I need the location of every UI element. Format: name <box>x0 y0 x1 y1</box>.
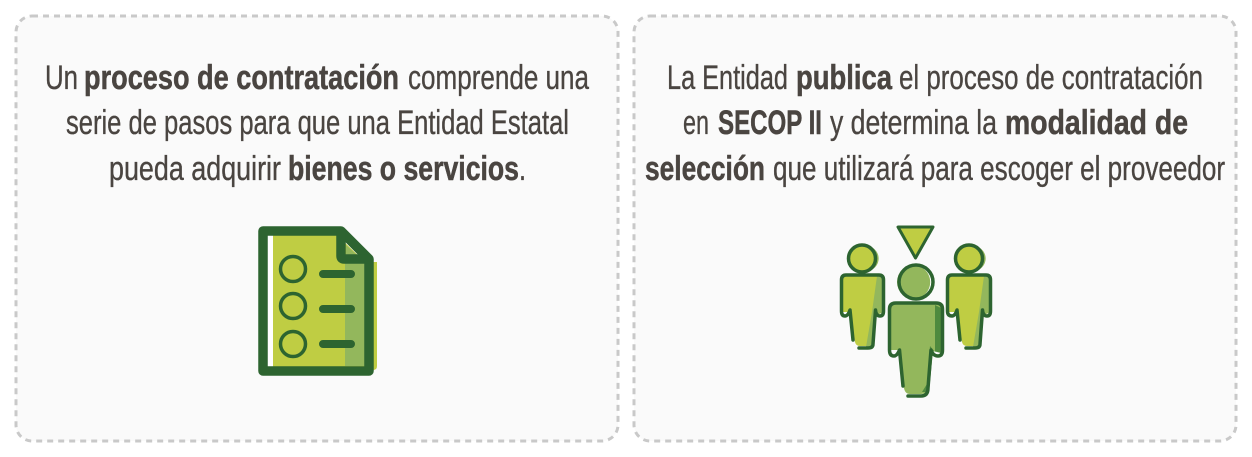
icon: left person <box>842 245 884 348</box>
text block: publicación y modalidad de selección: SECOP II <box>718 104 822 142</box>
text block: definition of proceso de contratación: Un <box>45 59 78 97</box>
text block: definition of proceso de contratación <box>45 59 589 188</box>
icon: right person <box>948 245 990 348</box>
icon: three people with selection marker <box>842 227 990 396</box>
panel: publicación en SECOP II <box>634 16 1236 441</box>
text block: publicación y modalidad de selección: La Entidad <box>667 59 788 97</box>
icon: selection triangle <box>898 227 933 258</box>
text block: publicación y modalidad de selección <box>645 59 1225 188</box>
text block: definition of proceso de contratación: serie de pasos para que una Entidad Estatal <box>66 104 569 142</box>
text block: publicación y modalidad de selección: publica <box>796 59 893 97</box>
text block: publicación y modalidad de selección: modalidad de <box>1005 104 1188 142</box>
icon: document with checklist <box>263 231 377 371</box>
text block: publicación y modalidad de selección: y determina la <box>830 104 997 142</box>
text block: publicación y modalidad de selección: selección <box>645 150 765 188</box>
icon: centre person <box>890 265 942 396</box>
panel: proceso de contratación <box>16 16 618 441</box>
text block: definition of proceso de contratación: comprende una <box>408 59 589 97</box>
text block: definition of proceso de contratación: . <box>519 150 526 188</box>
text block: definition of proceso de contratación: proceso de contratación <box>84 59 399 97</box>
text block: definition of proceso de contratación: pueda adquirir <box>109 150 281 188</box>
text block: publicación y modalidad de selección: en <box>683 104 709 142</box>
text block: definition of proceso de contratación: bienes o servicios <box>288 150 519 188</box>
